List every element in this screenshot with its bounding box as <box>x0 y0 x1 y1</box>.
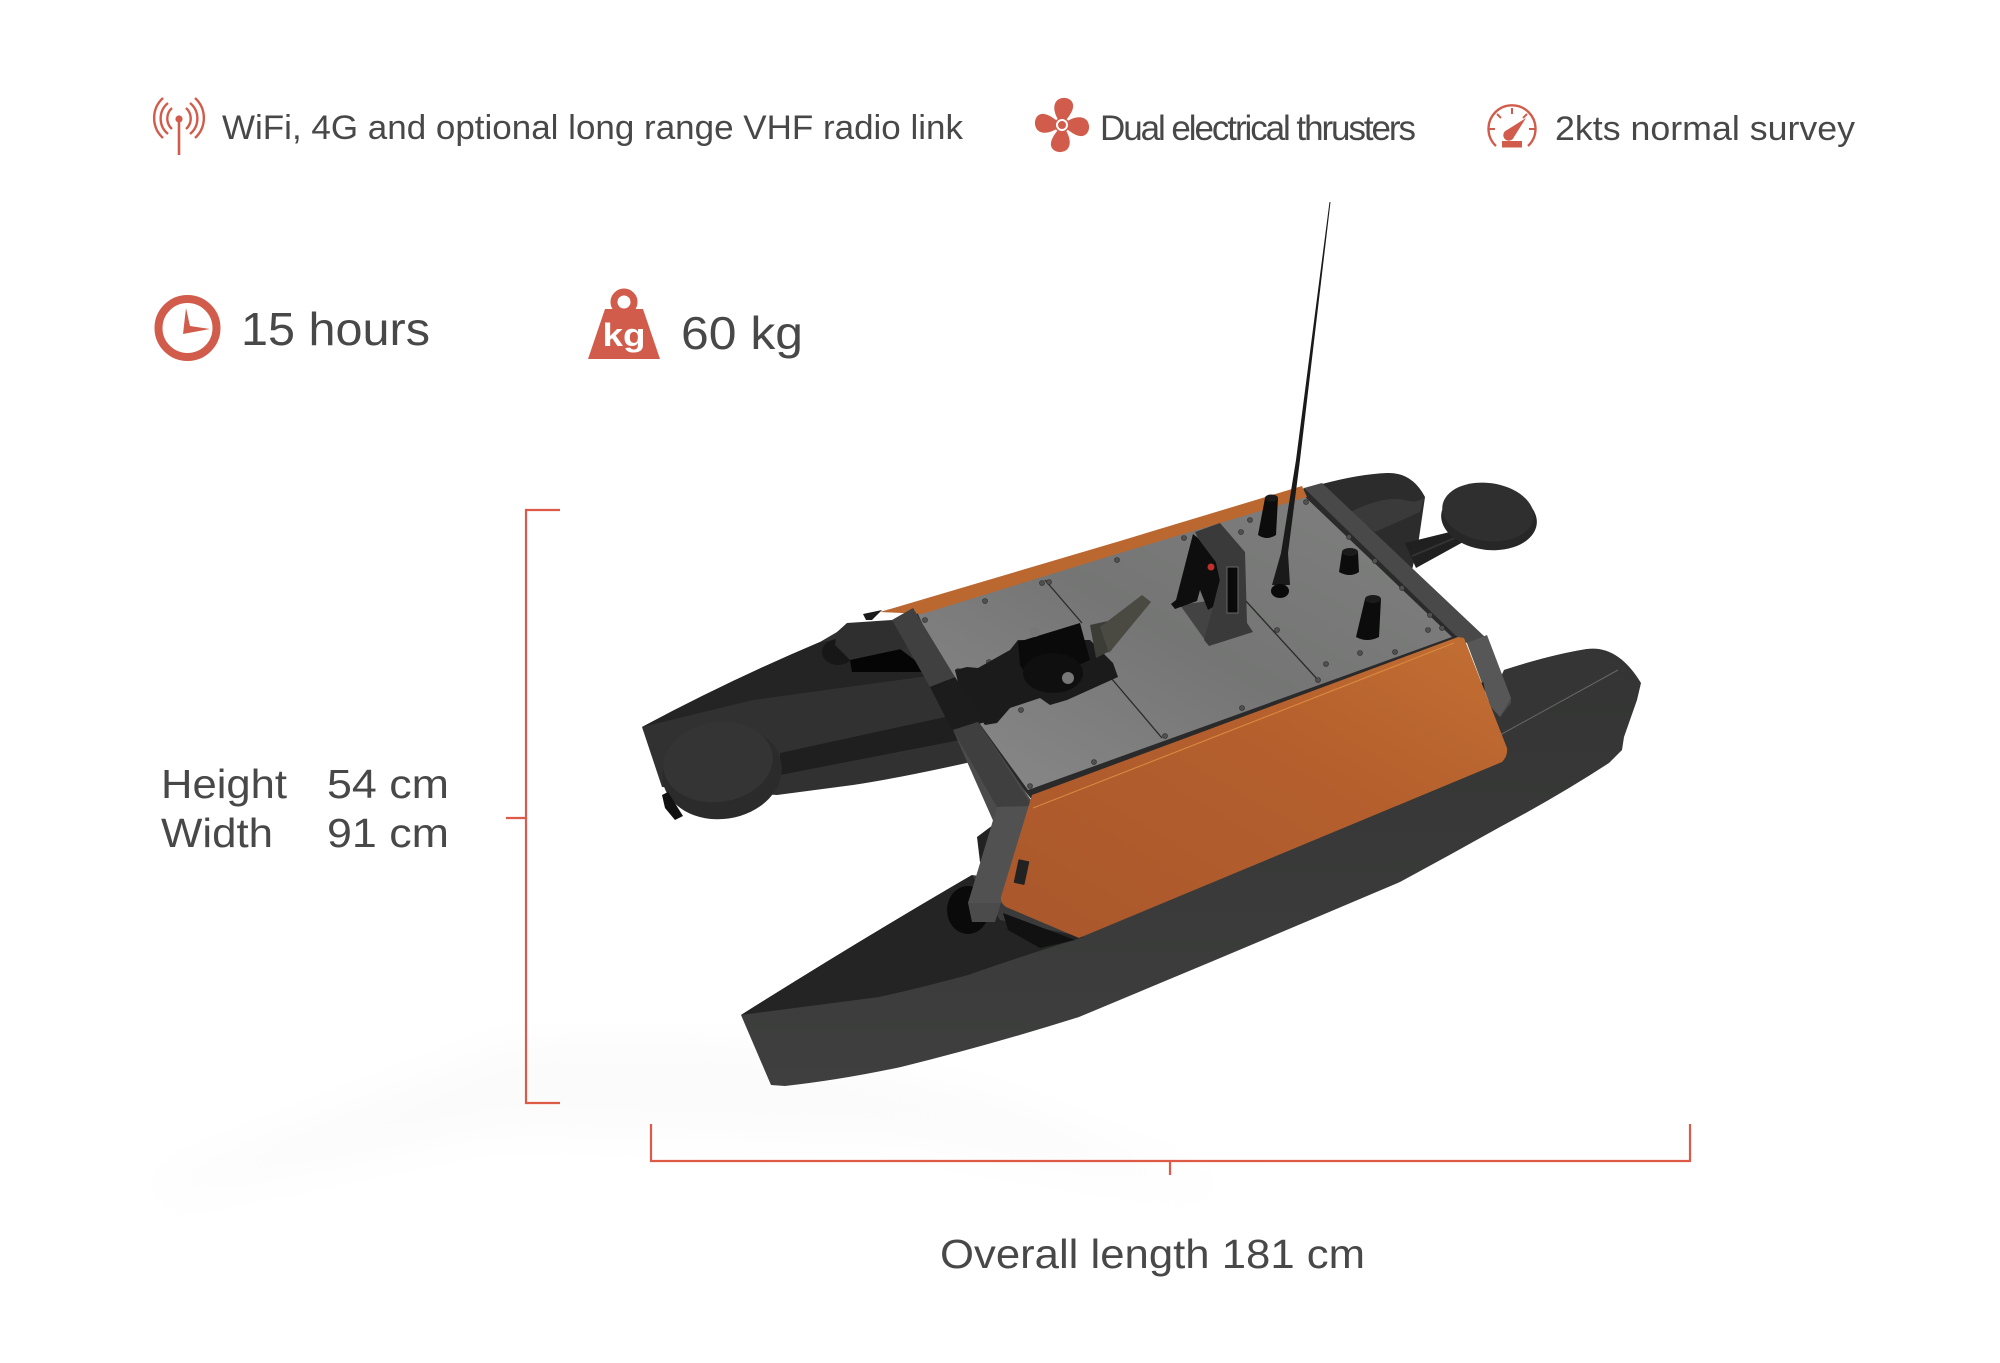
icon: speedometer <box>1488 105 1536 148</box>
right frame <box>1304 483 1511 717</box>
feature: thrusters <box>1034 97 1416 153</box>
feature: survey speed <box>1488 105 1855 148</box>
soft ground shadow <box>160 1040 1250 1200</box>
deck screws <box>922 500 1444 788</box>
icon: weight <box>588 292 660 359</box>
text: overall length: Overall length 181 cm <box>940 1231 1365 1277</box>
left frame <box>892 608 1033 922</box>
antenna mast <box>1271 202 1330 598</box>
text: thrusters: Dual electrical thrusters <box>1100 109 1416 148</box>
dimensions text: height and width: Width <box>161 810 273 856</box>
rear orange strip <box>880 486 1307 614</box>
deck plate <box>918 494 1452 790</box>
text: survey speed: 2kts normal survey <box>1555 110 1855 148</box>
left disc <box>656 715 788 827</box>
rear left hull <box>642 610 980 795</box>
bracket: length <box>651 1124 1690 1175</box>
deck seams <box>1045 545 1318 738</box>
dimensions text: height and width: 54 cm <box>327 761 449 807</box>
text: radio link: WiFi, 4G and optional long range VHF radio link <box>222 109 964 147</box>
icon: clock <box>158 299 216 357</box>
text: endurance: 15 hours <box>241 303 430 355</box>
right disc <box>1438 477 1540 555</box>
deck underlay <box>905 488 1468 800</box>
icon: weight: kg <box>602 317 646 353</box>
instrument stand <box>1171 523 1253 646</box>
knobs <box>1258 494 1381 640</box>
rear right hull <box>1322 473 1465 570</box>
icon: fan <box>1034 97 1090 153</box>
feature: endurance <box>158 299 430 357</box>
pivot mount <box>1018 595 1151 693</box>
deck cutout <box>955 640 1118 725</box>
front hull <box>741 649 1641 1086</box>
front orange panel <box>1001 637 1507 938</box>
dimensions text: height and width: Height <box>161 761 288 807</box>
vessel: catamaran <box>642 202 1641 1086</box>
feature: radio link <box>154 98 964 155</box>
dimensions text: height and width <box>161 761 449 856</box>
dimensions text: height and width: 91 cm <box>327 810 449 856</box>
text: weight: 60 kg <box>681 307 803 359</box>
icon: antenna <box>154 98 204 155</box>
bracket: height <box>506 510 560 1103</box>
feature: weight <box>588 292 803 359</box>
